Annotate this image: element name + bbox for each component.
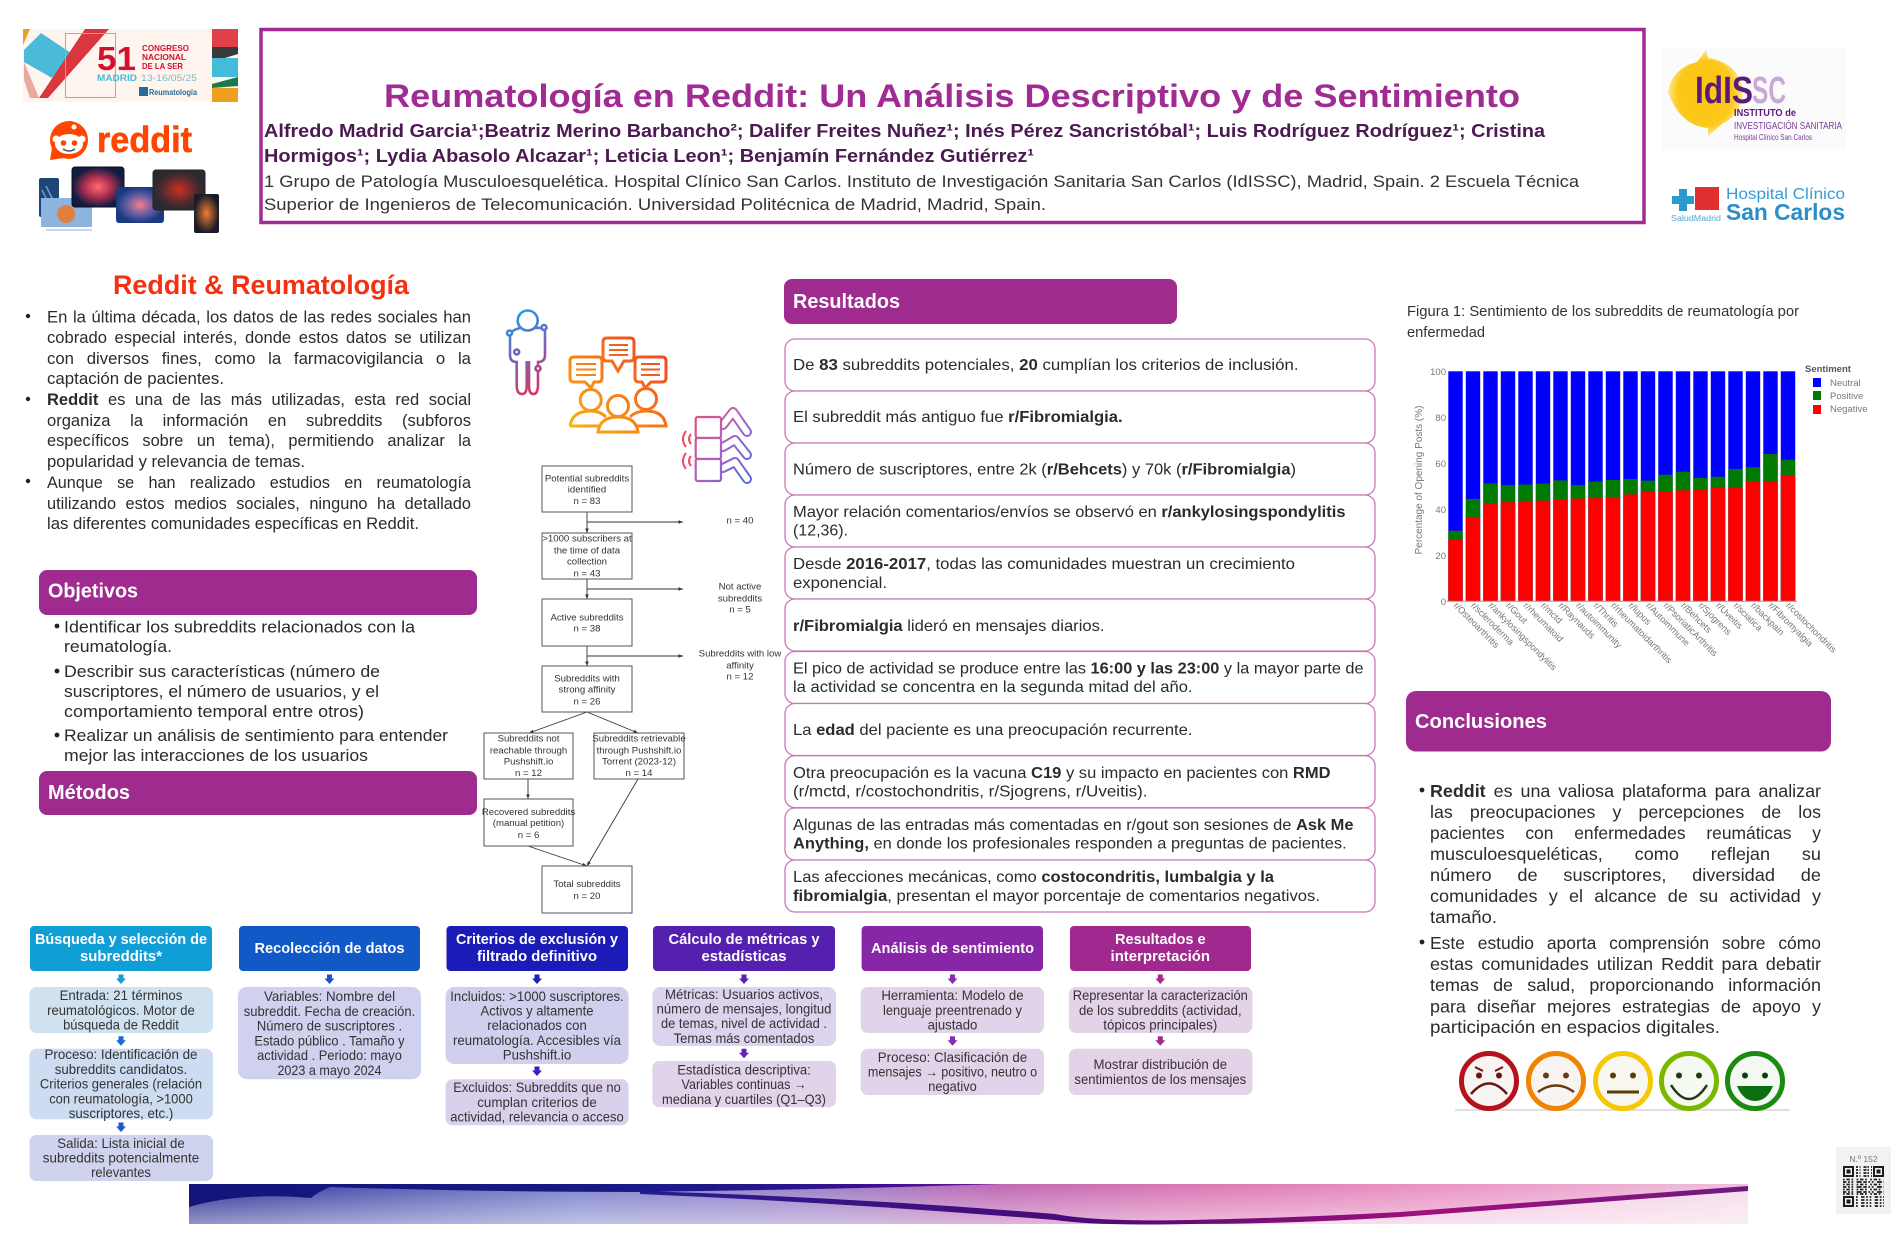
icon: sentiment faces <box>1455 1054 1790 1110</box>
column: Criterios de exclusión: cumplan criterios de <box>477 1095 597 1110</box>
y axis: 40 <box>1435 505 1446 516</box>
authors: Hormigos¹; Lydia Abasolo Alcazar¹; Leticia Leon¹; Benjamín Fernández Gutiérrez¹ <box>264 145 1034 166</box>
column: Cálculo de métricas <box>652 926 836 1107</box>
heading: Métodos: Métodos <box>48 782 130 804</box>
heading band <box>784 279 1177 324</box>
bullet list: organiza la información en subreddits (subforos <box>47 412 471 430</box>
result card 7: El pico de actividad se produce entre las 16:00 y las 23:00 y la mayor parte de <box>793 661 1364 678</box>
negative bars <box>1448 475 1795 601</box>
x axis labels: r/Behcets <box>1679 600 1714 635</box>
result card 7: la actividad se concentra en la segunda mitad del año. <box>793 679 1192 696</box>
box: recovered: Recovered subreddits <box>482 807 575 818</box>
exclusion labels <box>699 516 781 682</box>
objectives list: mejor las interacciones de los usuarios <box>64 746 368 765</box>
bullet list: cobrado especial interés, donde estos datos se utilizan <box>47 329 471 347</box>
people <box>570 388 666 432</box>
conclusions list: comunidades y el alcance de su actividad y <box>1430 886 1821 906</box>
connectors <box>528 512 683 866</box>
column: Análisis de sentimiento: Herramienta: Modelo de <box>881 988 1024 1003</box>
column: Criterios de exclusión: actividad, relevancia o acceso <box>450 1110 624 1124</box>
exclusion labels: Subreddits with low <box>699 648 781 660</box>
column: Cálculo de métricas: de temas, nivel de actividad . <box>661 1016 827 1031</box>
column: Criterios de exclusión: filtrado definitivo <box>477 949 597 965</box>
face: neutral <box>1596 1054 1650 1108</box>
legend: Sentiment <box>1805 364 1852 375</box>
column: Búsqueda y selección: Salida: Lista inicial de <box>57 1136 185 1151</box>
result card 7 <box>785 652 1375 704</box>
panel: Reddit & Reumatología <box>26 270 472 533</box>
column: Criterios de exclusión <box>446 926 629 1125</box>
conclusions list: Reddit es una valiosa plataforma para analizar <box>1430 781 1821 801</box>
column: Análisis de sentimiento: negativo <box>928 1079 977 1094</box>
conclusions list: participación en espacios digitales. <box>1430 1017 1720 1037</box>
column: Cálculo de métricas: Métricas: Usuarios activos, <box>665 987 823 1002</box>
heading: Métodos <box>39 771 477 815</box>
column: Búsqueda y selección: Búsqueda y selección de <box>35 932 207 948</box>
result card 1: De 83 subreddits potenciales, 20 cumplían los criterios de inclusión. <box>793 357 1298 374</box>
column: Análisis de sentimiento: Proceso: Clasificación de <box>878 1050 1027 1065</box>
bullet list: captación de pacientes. <box>47 370 224 388</box>
column: Resultados e interpretación: interpretación <box>1111 949 1210 965</box>
column: Criterios de exclusión: relacionados con <box>487 1018 587 1033</box>
affiliations <box>264 172 1580 214</box>
panel: Objetivos <box>39 570 477 765</box>
conclusions list: estas comunidades utilizan Reddit para debatir <box>1430 954 1821 974</box>
logo: 51 Congreso Nacional de la SER: Reumatología <box>149 88 197 97</box>
result card 8 <box>785 704 1375 756</box>
logo: 51 Congreso Nacional de la SER: 13-16/05/25 <box>141 73 197 84</box>
column: Criterios de exclusión: reumatología. Accesibles vía <box>453 1033 621 1048</box>
icon: people talking with speech bubbles <box>570 338 666 432</box>
y axis <box>1414 367 1446 608</box>
box: potential subreddits: identified <box>568 484 606 496</box>
column: Búsqueda y selección: subreddits potencialmente <box>43 1150 199 1166</box>
column: Resultados e interpretación <box>1069 926 1252 1095</box>
box: over 1000 subscribers <box>542 533 632 580</box>
neutral bars <box>1448 371 1795 601</box>
bullet list <box>26 308 472 533</box>
heading band <box>39 570 477 615</box>
x axis labels: r/Raynauds <box>1557 600 1597 641</box>
logo: 51 Congreso Nacional de la SER: CONGRESO <box>142 43 189 53</box>
objectives list: Describir sus características (número de <box>64 662 380 681</box>
x axis labels: r/lupus <box>1627 600 1653 627</box>
objectives list <box>55 618 448 765</box>
column: Búsqueda y selección: subreddits* <box>80 949 162 965</box>
logo: IdISSC: Hospital Clínico San Carlos <box>1734 133 1812 142</box>
column: Recolección de datos: Número de suscriptores . <box>257 1018 402 1034</box>
column: Recolección de datos: subreddit. Fecha de creación. <box>244 1004 415 1019</box>
x axis labels: r/Sjogrens <box>1697 600 1734 637</box>
bullet list: Reddit es una de las más utilizadas, esta red social <box>47 391 471 409</box>
x axis labels: r/scleroderma <box>1469 600 1516 648</box>
result card 4 <box>785 495 1375 547</box>
logo: 51 Congreso Nacional de la SER: 51 <box>97 40 136 77</box>
authors: Alfredo Madrid Garcia¹;Beatriz Merino Barbancho²; Dalifer Freites Nuñez¹; Inés Pérez Sancristóbal¹; Luis Rodríguez Rodríguez¹; Cristina <box>264 120 1546 141</box>
footer banner <box>189 1184 1748 1224</box>
figure caption <box>1407 303 1799 341</box>
result card 11: Las afecciones mecánicas, como costocondritis, lumbalgia y la <box>793 869 1274 886</box>
column: Búsqueda y selección: subreddits candidatos. <box>55 1062 187 1077</box>
column: Análisis de sentimiento: ajustado <box>928 1018 977 1032</box>
y axis: 80 <box>1435 413 1446 424</box>
box: over 1000 subscribers: n = 43 <box>574 568 600 580</box>
result card 2: El subreddit más antiguo fue r/Fibromialgia. <box>793 409 1123 426</box>
face: angry <box>1462 1054 1516 1108</box>
box: retrievable: Subreddits retrievable <box>592 734 686 744</box>
logo: 51 Congreso Nacional de la SER: DE LA SER <box>142 61 183 71</box>
result card 10: Algunas de las entradas más comentadas en r/gout son sesiones de Ask Me <box>793 817 1354 834</box>
column: Resultados e interpretación: Resultados e <box>1115 932 1206 948</box>
flowchart: subreddit selection <box>482 466 781 913</box>
box: strong affinity: Subreddits with <box>554 674 620 684</box>
conclusions list: Este estudio aporta comprensión sobre cómo <box>1430 933 1821 953</box>
logo: 51 Congreso Nacional de la SER <box>23 29 238 102</box>
column: Búsqueda y selección: búsqueda de Reddit <box>63 1018 179 1032</box>
column: Análisis de sentimiento <box>861 926 1044 1095</box>
logo: IdISSC: IdIS <box>1695 70 1753 112</box>
icon: spine with pain waves <box>683 412 747 481</box>
box: not reachable: n = 12 <box>515 768 542 779</box>
logo: IdISSC: INVESTIGACIÓN SANITARIA <box>1734 119 1842 132</box>
column: Cálculo de métricas: Estadística descriptiva: <box>677 1062 811 1078</box>
QR code panel: N.º 152 <box>1849 1154 1878 1164</box>
column: Análisis de sentimiento: Análisis de sentimiento <box>871 941 1034 957</box>
column: Criterios de exclusión: Activos y altamente <box>481 1004 593 1018</box>
box: over 1000 subscribers: >1000 subscribers at <box>542 534 632 544</box>
objectives list: Realizar un análisis de sentimiento para entender <box>64 726 448 745</box>
x axis labels <box>1452 600 1839 673</box>
heading band <box>1406 691 1831 752</box>
box: total: Total subreddits <box>553 879 621 890</box>
objectives list: reumatología. <box>64 637 172 656</box>
box: recovered: n = 6 <box>518 830 539 841</box>
conclusions list: tamaño. <box>1430 907 1497 927</box>
column: Cálculo de métricas: Temas más comentados <box>674 1031 815 1046</box>
heading: Reddit & Reumatología <box>113 270 410 300</box>
bullet list: utilizando estos medios sociales, ninguno ha detallado <box>47 495 471 513</box>
box: total <box>542 866 632 913</box>
box: over 1000 subscribers: collection <box>567 556 607 568</box>
box: strong affinity <box>542 666 632 712</box>
bullet list: popularidad y relevancia de temas. <box>47 453 305 471</box>
box: retrievable: Torrent (2023-12) <box>602 756 676 768</box>
y axis: 100 <box>1430 367 1446 378</box>
x axis labels: r/Fibromyalgia <box>1767 600 1815 649</box>
box: not reachable: Subreddits not <box>498 734 560 744</box>
x axis labels: r/PsoriaticArthritis <box>1662 600 1720 659</box>
icon: reddit mascot <box>50 121 88 160</box>
exclusion labels: n = 12 <box>727 672 753 682</box>
face: happy <box>1662 1054 1716 1108</box>
x axis labels: r/rheumatoidarthritis <box>1609 600 1674 665</box>
column: Recolección de datos: Recolección de datos <box>254 941 404 957</box>
column: Búsqueda y selección <box>30 926 213 1181</box>
box: recovered: (manual petition) <box>493 818 564 829</box>
result card 6 <box>785 599 1375 651</box>
logo: Hospital Clínico San Carlos: Hospital Clínico <box>1726 186 1845 203</box>
box: active subreddits <box>542 599 632 646</box>
conclusions list: las preocupaciones y percepciones de los <box>1430 802 1821 822</box>
bullet list: En la última década, los datos de las redes sociales han <box>47 308 471 326</box>
bullet list: las diferentes comunidades específicas en Reddit. <box>47 515 419 533</box>
positive bars <box>1448 454 1795 601</box>
conclusions list: musculoesqueléticas, como reflejan su <box>1430 844 1821 864</box>
objectives list: suscriptores, el número de usuarios, y el <box>64 682 379 701</box>
heading band: Objetivos <box>48 580 138 602</box>
x axis labels: r/Autoimmune <box>1644 600 1692 648</box>
box: strong affinity: strong affinity <box>559 684 616 696</box>
result card 5 <box>785 547 1375 599</box>
y axis: 20 <box>1435 551 1446 562</box>
result card 8: La edad del paciente es una preocupación recurrente. <box>793 722 1192 739</box>
objectives list: comportamiento temporal entre otros) <box>64 702 364 721</box>
heading band: Resultados <box>793 291 900 313</box>
column: Cálculo de métricas: Cálculo de métricas y <box>668 932 820 948</box>
conclusions list: número de suscriptores, diversidad de <box>1430 865 1821 885</box>
result card 9: Otra preocupación es la vacuna C19 y su impacto en pacientes con RMD <box>793 765 1331 782</box>
column: Cálculo de métricas: mediana y cuartiles (Q1–Q3) <box>662 1092 826 1107</box>
result card 5: Desde 2016-2017, todas las comunidades muestran un crecimiento <box>793 556 1295 573</box>
column: Cálculo de métricas: número de mensajes, longitud <box>657 1002 831 1016</box>
panel: Resultados <box>784 279 1375 912</box>
column: Análisis de sentimiento: mensajes → positivo, neutro o <box>868 1064 1037 1080</box>
affiliations: Superior de Ingenieros de Telecomunicación. Universidad Politécnica de Madrid, Madrid, Spain. <box>264 195 1046 214</box>
bullet list: Aunque se han realizado estudios en reumatología <box>47 474 472 492</box>
x axis labels: r/mctd <box>1539 600 1564 625</box>
authors <box>264 120 1546 166</box>
column: Criterios de exclusión: Criterios de exclusión y <box>456 932 619 948</box>
QR modules <box>1843 1166 1884 1207</box>
box: recovered <box>482 799 575 846</box>
logo: IdISSC: INSTITUTO de <box>1734 107 1796 119</box>
panel: Conclusiones <box>1406 691 1831 1110</box>
box: retrievable: through Pushshift.io <box>597 746 681 756</box>
column: Recolección de datos <box>238 926 421 1079</box>
logo: IdISSC: SC <box>1752 70 1786 112</box>
x axis labels: r/Uveitis <box>1714 600 1745 631</box>
box: strong affinity: n = 26 <box>574 696 600 708</box>
x axis labels: r/autoimmunity <box>1574 600 1624 650</box>
QR code panel <box>1836 1147 1891 1214</box>
legend <box>1805 364 1868 415</box>
box: retrievable <box>592 733 686 779</box>
column: Recolección de datos: Estado público . Tamaño y <box>254 1034 405 1048</box>
box: not reachable: reachable through <box>490 746 567 756</box>
column: Cálculo de métricas: estadísticas <box>702 949 786 965</box>
logo: Hospital Clínico San Carlos: San Carlos <box>1726 199 1845 225</box>
column: Resultados e interpretación: Representar la caracterización <box>1073 988 1248 1003</box>
exclusion labels: affinity <box>726 660 754 672</box>
column: Criterios de exclusión: Pushshift.io <box>503 1048 571 1062</box>
box: retrievable: n = 14 <box>626 768 653 779</box>
exclusion labels: subreddits <box>718 594 762 604</box>
y axis: Percentage of Opening Posts (%) <box>1414 406 1425 554</box>
figure caption: Figura 1: Sentimiento de los subreddits de reumatología por <box>1407 303 1799 320</box>
legend: Negative <box>1830 404 1868 415</box>
process columns <box>30 926 1252 1181</box>
x axis labels: r/Thritis <box>1592 600 1621 629</box>
logo: IdISSC <box>1662 48 1846 150</box>
result card 11 <box>785 860 1375 912</box>
column: Criterios de exclusión: Incluidos: >1000 suscriptores. <box>450 989 624 1004</box>
result card 11: fibromialgia, presentan el mayor porcentaje de comentarios negativos. <box>793 888 1320 905</box>
logo: 51 Congreso Nacional de la SER: NACIONAL <box>142 52 186 62</box>
legend: Positive <box>1830 391 1863 402</box>
box: active subreddits: n = 38 <box>574 624 600 634</box>
column: Búsqueda y selección: con reumatología, >1000 <box>49 1092 193 1106</box>
exclusion labels: Not active <box>719 582 761 592</box>
title: Reumatología en Reddit: Un Análisis Descriptivo y de Sentimiento <box>384 78 1520 114</box>
exclusion labels: n = 5 <box>729 604 751 616</box>
x axis labels: r/sciatica <box>1732 600 1765 634</box>
column: Búsqueda y selección: reumatológicos. Motor de <box>47 1003 195 1018</box>
box: not reachable: Pushshift.io <box>504 756 553 768</box>
column: Análisis de sentimiento: lenguaje preentrenado y <box>883 1003 1022 1018</box>
column: Búsqueda y selección: Proceso: Identificación de <box>44 1047 198 1062</box>
face: very happy <box>1728 1054 1782 1108</box>
conclusions list <box>1420 781 1821 1037</box>
conclusions list: pacientes con enfermedades reumáticas y <box>1430 823 1821 843</box>
logo: Hospital Clínico San Carlos: SaludMadrid <box>1671 214 1721 223</box>
column: Búsqueda y selección: relevantes <box>91 1165 151 1180</box>
logo: reddit: reddit <box>97 119 192 160</box>
column: Búsqueda y selección: suscriptores, etc.) <box>69 1106 173 1121</box>
x axis labels: r/Gout <box>1504 600 1530 626</box>
logo: 51 Congreso Nacional de la SER: MADRID <box>97 73 137 84</box>
result card 3: Número de suscriptores, entre 2k ( r/Behcets) y 70k (r/Fibromialgia) <box>793 462 1296 478</box>
result card 10: Anything, en donde los profesionales responden a preguntas de pacientes. <box>793 836 1347 853</box>
x axis labels: r/rheumatoid <box>1522 600 1565 644</box>
conclusions list: para diseñar mejores estrategias de apoyo y <box>1430 996 1821 1016</box>
objectives list: Identificar los subreddits relacionados con la <box>64 618 416 636</box>
result card 10 <box>785 808 1375 860</box>
column: Recolección de datos: 2023 a mayo 2024 <box>277 1063 382 1078</box>
result card 4: (12,36). <box>793 523 848 540</box>
box: not reachable <box>484 733 573 779</box>
legend: Neutral <box>1830 378 1861 389</box>
result card 1 <box>785 339 1375 391</box>
column: Recolección de datos: Variables: Nombre del <box>264 989 395 1004</box>
result card 4: Mayor relación comentarios/envíos se observó en r/ankylosingspondylitis <box>793 504 1346 521</box>
result card 9: (r/mctd, r/costochondritis, r/Sjogrens, r/Uveitis). <box>793 784 1148 800</box>
header box <box>261 30 1644 222</box>
column: Cálculo de métricas: Variables continuas → <box>682 1077 806 1092</box>
stacked bar chart: sentiment by subreddit <box>1414 364 1868 673</box>
face: sad <box>1528 1054 1584 1108</box>
speech bubbles <box>570 338 666 388</box>
column: Criterios de exclusión: Excluidos: Subreddits que no <box>453 1080 621 1095</box>
box: total: n = 20 <box>574 891 600 902</box>
figure caption: enfermedad <box>1407 324 1485 341</box>
result card 9 <box>785 756 1375 808</box>
column: Resultados e interpretación: de los subreddits (actividad, <box>1079 1003 1242 1018</box>
y axis: 0 <box>1441 597 1446 608</box>
x axis labels: r/Osteoarthritis <box>1452 600 1502 650</box>
box: potential subreddits: Potential subreddits <box>545 474 629 484</box>
x axis labels: r/backpain <box>1749 600 1786 637</box>
image: medical collage <box>39 167 219 233</box>
result card 6: r/Fibromialgia lideró en mensajes diarios. <box>793 618 1104 635</box>
box: active subreddits: Active subreddits <box>550 612 624 624</box>
column: Recolección de datos: actividad . Periodo: mayo <box>257 1048 402 1063</box>
result card 5: exponencial. <box>793 575 887 592</box>
result card 3 <box>785 443 1375 495</box>
affiliations: 1 Grupo de Patología Musculoesquelética. Hospital Clínico San Carlos. Instituto de Investigación Sanitaria San Carlos (IdISSC), Madrid, Spain. 2 Escuela Técnica <box>264 172 1580 191</box>
x axis labels: r/ankylosingspondylitis <box>1487 600 1559 673</box>
exclusion labels: n = 40 <box>727 516 753 526</box>
box: potential subreddits <box>542 466 632 512</box>
box: potential subreddits: n = 83 <box>574 496 600 507</box>
box: over 1000 subscribers: the time of data <box>554 546 621 556</box>
y axis: 60 <box>1435 459 1446 470</box>
x axis labels: r/costochondritis <box>1784 600 1839 655</box>
column: Búsqueda y selección: Criterios generales (relación <box>40 1076 202 1092</box>
logo: reddit <box>50 119 192 160</box>
column: Resultados e interpretación: tópicos principales) <box>1103 1018 1217 1032</box>
column: Búsqueda y selección: Entrada: 21 términos <box>60 988 183 1003</box>
bullet list: específicos sobre un tema), permitiendo analizar la <box>47 432 472 450</box>
conclusions list: temas de salud, proporcionando información <box>1430 975 1821 995</box>
column: Resultados e interpretación: Mostrar distribución de <box>1094 1057 1227 1072</box>
bullet list: con diversos fines, como la farmacovigilancia o la <box>47 350 472 368</box>
result card 2 <box>785 391 1375 443</box>
logo: Hospital Clínico San Carlos <box>1671 186 1845 225</box>
heading band: Conclusiones <box>1415 711 1547 733</box>
icon: human body with joints <box>507 310 546 394</box>
column: Resultados e interpretación: sentimientos de los mensajes <box>1074 1072 1246 1087</box>
